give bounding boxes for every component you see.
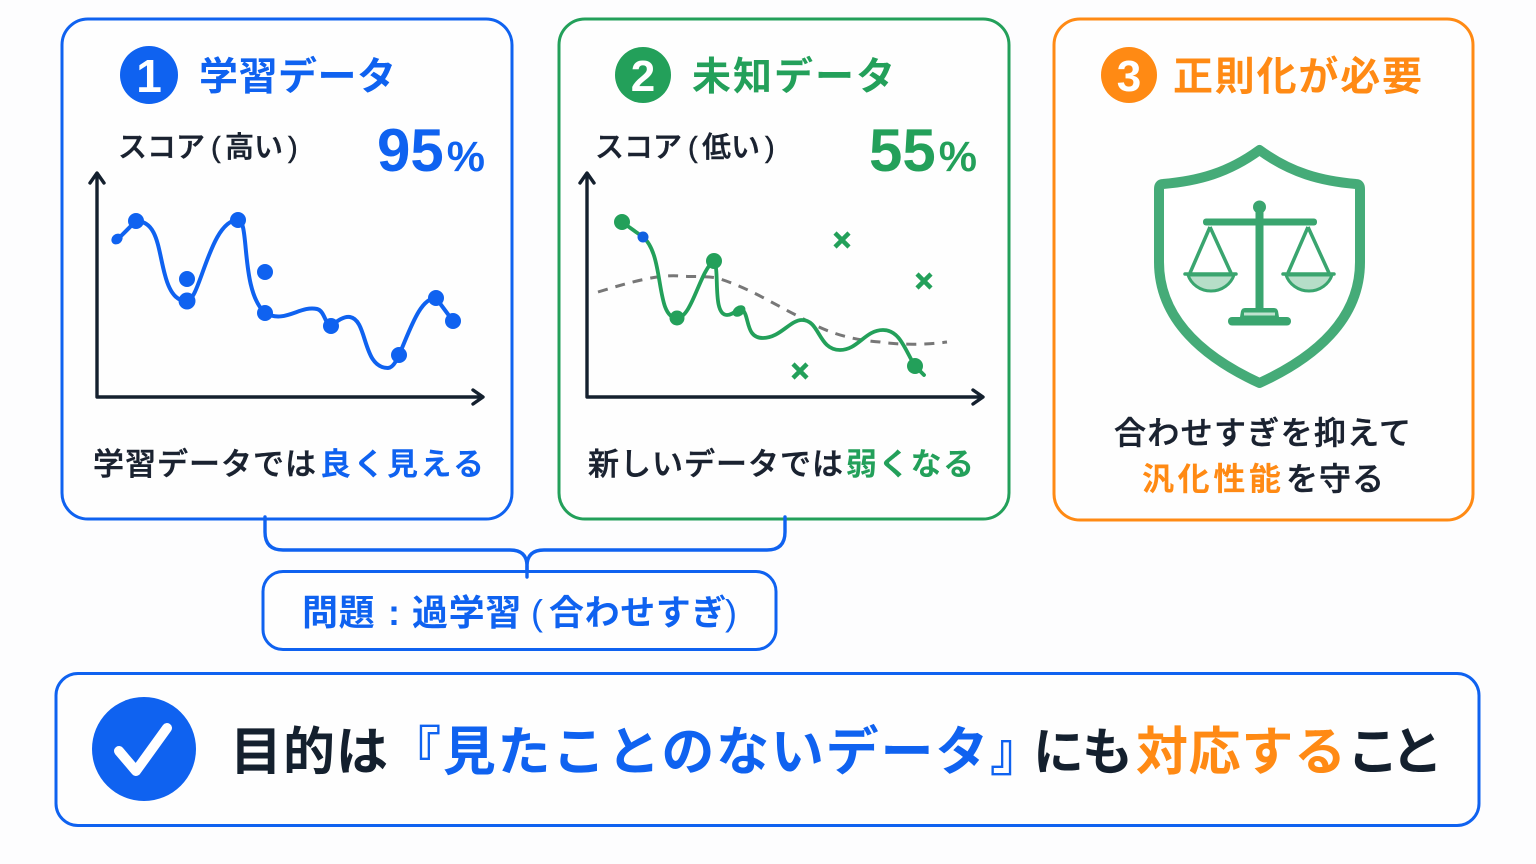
icon: number 1	[120, 46, 178, 104]
heading: unseen data: 未知データ	[692, 55, 895, 99]
label: score low: スコア	[595, 132, 682, 164]
callout: overfitting: :	[388, 592, 401, 633]
stat: 95 percent: 95%	[377, 117, 485, 184]
heading: regularization: 正則化が必要	[1173, 55, 1422, 99]
caption: training: 学習データでは	[93, 447, 316, 482]
callout: overfitting: )	[725, 592, 738, 633]
label: score high: 高い	[225, 131, 283, 164]
panel: training data	[62, 19, 512, 519]
text: goal statement: にも	[1033, 724, 1133, 781]
caption: training: 良く見える	[320, 447, 484, 482]
label: score low: 低い	[702, 131, 760, 164]
panel: regularization	[1054, 19, 1473, 520]
caption: unseen: 新しいデータでは	[588, 447, 843, 482]
text: goal statement: 『見たことのないデータ』	[388, 723, 1043, 782]
caption: unseen	[588, 447, 974, 482]
text: goal statement: こと	[1347, 724, 1443, 782]
caption: training	[93, 447, 484, 482]
stat: 55 percent: 55%	[869, 117, 977, 184]
text: goal statement: 対応する	[1136, 724, 1346, 782]
panel: unseen data	[559, 19, 1009, 519]
icon: check	[92, 697, 196, 801]
icon: number 2: 2	[631, 52, 655, 101]
callout: overfitting	[263, 566, 776, 650]
caption: regularization	[1114, 415, 1411, 497]
line chart: training	[90, 173, 483, 404]
icon: number 1: 1	[136, 50, 162, 102]
banner: goal	[56, 674, 1479, 826]
label: score high: )	[288, 132, 298, 164]
heading: training data: 学習データ	[199, 55, 396, 99]
icon: number 2	[615, 47, 671, 103]
callout: overfitting: (	[531, 592, 544, 633]
callout: overfitting: 合わせすぎ	[549, 594, 727, 633]
caption: unseen: 弱くなる	[846, 447, 974, 482]
line chart: unseen	[580, 173, 983, 404]
text: goal statement	[230, 723, 1443, 782]
bracket connector	[265, 517, 785, 576]
label: score low: (	[688, 132, 698, 164]
icon: shield with scales	[1159, 150, 1360, 383]
callout: overfitting: 問題	[302, 592, 375, 633]
icon: number 3	[1101, 47, 1157, 103]
text: goal statement: 目的は	[230, 724, 388, 782]
callout: overfitting: 過学習	[412, 592, 522, 633]
label: score low: )	[765, 132, 775, 164]
icon: number 3: 3	[1117, 52, 1141, 101]
caption: regularization: 合わせすぎを抑えて	[1114, 415, 1411, 451]
caption: regularization: 汎化性能	[1142, 461, 1281, 497]
caption: regularization: を守る	[1286, 461, 1384, 497]
markers: unseen points	[793, 233, 931, 378]
label: score high: スコア	[118, 132, 205, 164]
label: score high: (	[211, 132, 221, 164]
